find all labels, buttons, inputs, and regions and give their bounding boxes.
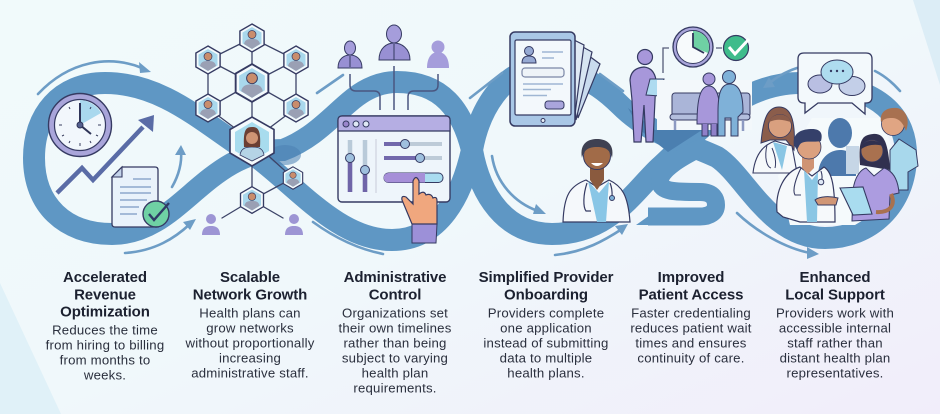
column: Simplified Provider Onboarding: Simplified Provider: [479, 269, 614, 286]
column: Improved Patient Access: reduces patient wait: [630, 321, 752, 336]
icon: user left: [202, 214, 220, 235]
access: bench with patients: [657, 70, 752, 136]
column: Enhanced Local Support: Enhanced: [800, 269, 870, 286]
column: Administrative Control: Control: [369, 286, 421, 303]
hex: top person: [240, 24, 264, 52]
column: Enhanced Local Support: accessible internal: [779, 321, 891, 336]
support: interior of loop: [778, 118, 893, 225]
column: Scalable Network Growth: [184, 269, 315, 381]
network: hex graph: [196, 24, 308, 235]
icon: pointing hand: [402, 178, 437, 243]
column: Enhanced Local Support: [776, 269, 894, 381]
support: silhouette in background: [818, 118, 859, 176]
column: Scalable Network Growth: Health plans can: [199, 306, 301, 321]
hex: left person: [196, 46, 220, 74]
column: Administrative Control: health plan: [362, 366, 428, 381]
column: Enhanced Local Support: Local Support: [785, 286, 885, 303]
hex: right person: [284, 46, 308, 74]
column: Simplified Provider Onboarding: health plans.: [507, 366, 585, 381]
hex: lower left person: [196, 94, 220, 122]
column: Enhanced Local Support: distant health plan: [780, 351, 890, 366]
support: speech bubble: [798, 53, 872, 114]
icon: clock: [48, 94, 112, 156]
hex: center person: [236, 64, 268, 102]
column: Accelerated Revenue Optimization: Reduces the time: [52, 322, 158, 337]
column: Scalable Network Growth: administrative staff.: [191, 366, 309, 381]
icon: document with check: [112, 167, 169, 227]
support: male doctor: [777, 129, 838, 222]
column: Administrative Control: rather than being: [343, 336, 447, 351]
column: Enhanced Local Support: Providers work with: [776, 306, 894, 321]
column: Scalable Network Growth: without proportionally: [184, 336, 315, 351]
column: Administrative Control: subject to varying: [342, 351, 448, 366]
column: Administrative Control: [338, 269, 452, 396]
onboarding: tablet with stacked forms: [510, 32, 600, 126]
icon: growth arrow: [57, 115, 154, 193]
hex: small right person: [283, 167, 303, 189]
column: Improved Patient Access: continuity of care.: [637, 351, 745, 366]
column: Administrative Control: Organizations set: [342, 306, 448, 321]
control: stakeholders: [338, 25, 449, 110]
infinity ribbon: [34, 69, 906, 240]
onboarding: doctor: [563, 139, 630, 222]
column: Accelerated Revenue Optimization: from months to: [60, 352, 150, 367]
crossing shadows: [269, 145, 301, 165]
access: check badge: [724, 36, 749, 60]
column: Enhanced Local Support: staff rather than: [787, 336, 883, 351]
support: woman in purple with tablet: [840, 134, 899, 221]
S bend: [648, 148, 716, 216]
support: man in blue shirt: [881, 108, 918, 190]
column: Improved Patient Access: [630, 269, 752, 366]
column: Scalable Network Growth: increasing: [219, 351, 281, 366]
column: Enhanced Local Support: representatives.: [786, 366, 884, 381]
column: Accelerated Revenue Optimization: Optimization: [60, 304, 150, 321]
control: settings window: [338, 116, 450, 202]
column: Improved Patient Access: Improved: [658, 269, 724, 286]
column: Simplified Provider Onboarding: [479, 269, 614, 381]
access: clock: [673, 27, 713, 67]
icon: person left: [338, 41, 362, 68]
column: Administrative Control: Administrative: [344, 269, 446, 286]
hex: small bottom person: [241, 187, 263, 213]
column: Accelerated Revenue Optimization: from hiring to billing: [46, 337, 164, 352]
column: Improved Patient Access: Faster credentialing: [631, 306, 751, 321]
column: Simplified Provider Onboarding: Providers complete: [488, 306, 604, 321]
hex: lower right person: [284, 94, 308, 122]
column: Accelerated Revenue Optimization: Accelerated: [63, 269, 147, 286]
column: Improved Patient Access: times and ensures: [635, 336, 747, 351]
column: Simplified Provider Onboarding: one application: [500, 321, 592, 336]
column: Administrative Control: requirements.: [353, 381, 437, 396]
access: waiting person with clipboard: [630, 48, 722, 142]
icon: person center: [379, 25, 410, 60]
column: Simplified Provider Onboarding: instead of submitting: [483, 336, 609, 351]
column: Scalable Network Growth: grow networks: [206, 321, 294, 336]
column: Accelerated Revenue Optimization: Revenue: [74, 286, 136, 303]
icon: user right: [285, 214, 303, 235]
column: Simplified Provider Onboarding: data to multiple: [500, 351, 592, 366]
column: Scalable Network Growth: Scalable: [220, 269, 280, 286]
hex: main person: [230, 117, 274, 166]
decorative corner: [0, 283, 61, 414]
icon: person right: [427, 40, 449, 68]
column: Accelerated Revenue Optimization: weeks.: [83, 367, 126, 382]
column: Simplified Provider Onboarding: Onboarding: [504, 286, 588, 303]
column: Improved Patient Access: Patient Access: [639, 286, 743, 303]
flow arrows: [38, 61, 900, 259]
column: Accelerated Revenue Optimization: [46, 269, 164, 382]
support: female doctor: [753, 107, 797, 173]
column: Administrative Control: their own timelines: [338, 321, 452, 336]
column: Scalable Network Growth: Network Growth: [193, 286, 307, 303]
